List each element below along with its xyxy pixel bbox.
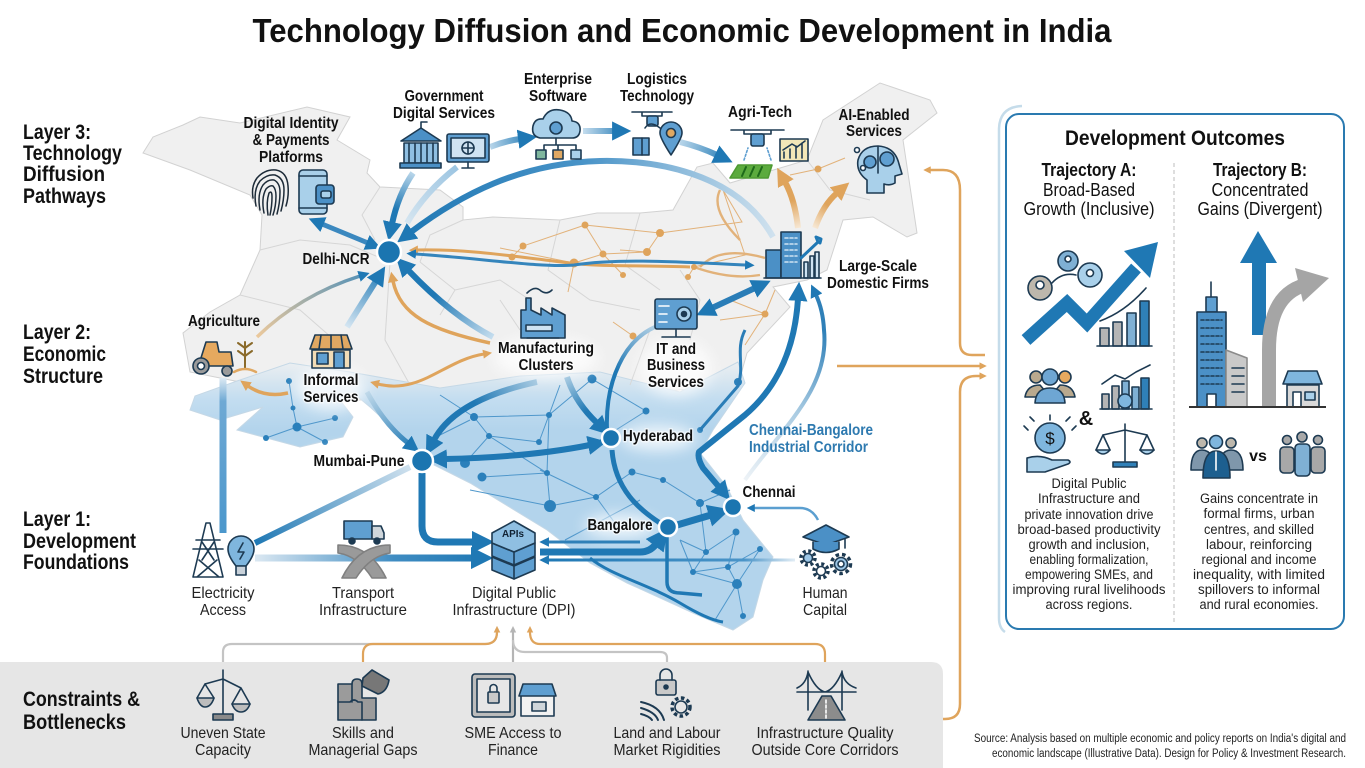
arrow: IT services and firms [712, 288, 755, 308]
label: IT and business services: Business [647, 357, 705, 374]
connector: skills gaps [363, 632, 497, 662]
label: IT and business services: IT and [656, 341, 696, 358]
icon: IT server monitor [655, 299, 697, 337]
arrow: manufacturing and informal services [378, 354, 484, 386]
label: human capital: Human [802, 585, 848, 602]
icon: truck on road [338, 521, 390, 578]
arrow: DPI upper return [548, 540, 640, 544]
icon: monitor with globe [447, 134, 489, 168]
arrow: government to Delhi [392, 173, 413, 224]
arrow: manufacturing to Mumbai [434, 382, 537, 440]
divider [1173, 163, 1175, 625]
node: Chennai [724, 498, 742, 516]
trajectory A description: Infrastructure and [1038, 491, 1140, 506]
arrow: industrial corridor [698, 299, 798, 487]
outer accent arc [999, 106, 1022, 632]
trajectory B heading: Gains (Divergent) [1198, 199, 1322, 219]
title: Technology Diffusion and Economic Development in India [252, 12, 1112, 49]
flow arrows [223, 131, 985, 719]
layer 3 label: Technology [23, 142, 122, 165]
arrow: outer corridor arc [745, 295, 824, 480]
heading: constraints and bottlenecks: Constraints & [23, 688, 140, 711]
arrow: electricity to Mumbai [255, 467, 410, 543]
label: SME access to finance: SME Access to [464, 725, 562, 742]
icon: large firms [764, 232, 821, 278]
arrow: economic structure to outcomes [837, 365, 980, 367]
arrow: coastal line [700, 330, 745, 430]
connector: state capacity [223, 632, 497, 662]
node: Hyderabad [602, 429, 620, 447]
arrow: digital services to Delhi [407, 167, 457, 223]
trajectory B description: Gains concentrate in [1200, 491, 1318, 506]
label: AI-enabled services: Services [846, 123, 902, 140]
icon: government building [400, 122, 441, 168]
icon: business professionals [1191, 436, 1243, 478]
trajectory A description: growth and inclusion, [1028, 537, 1150, 552]
arrow: constraints to outcomes [928, 376, 980, 719]
label: government digital services: Digital Services [393, 105, 495, 122]
arrow: human capital to Chennai [754, 508, 818, 520]
arrow: electricity to DPI [255, 554, 473, 562]
arrow: firms to agri-tech [785, 182, 798, 228]
icon: corporate tower [1197, 282, 1247, 407]
technology pathway labels [188, 71, 929, 619]
trajectory B description: labour, reinforcing [1206, 537, 1312, 552]
versus label: vs [1249, 448, 1267, 465]
label: digital public infrastructure: Digital Public [472, 585, 556, 602]
icon: small shop [519, 684, 556, 716]
trajectory A description: Digital Public [1052, 476, 1127, 491]
layer 2 label: Economic [23, 343, 106, 366]
label: infrastructure quality: Outside Core Corridors [752, 742, 898, 759]
label: manufacturing clusters: Manufacturing [498, 340, 594, 357]
label: electricity access: Access [200, 602, 246, 619]
trajectory B description: regional and income [1202, 552, 1316, 567]
layer 3 label: Pathways [23, 185, 106, 208]
arrow: firms to Delhi orange [417, 250, 690, 267]
arrow: informal services to Mumbai [367, 392, 408, 443]
label: logistics technology: Logistics [627, 71, 687, 88]
label: land and labour: Market Rigidities [614, 742, 720, 759]
arrow: Bangalore south [667, 537, 702, 595]
icon: balance scales [1096, 424, 1154, 467]
arrow: IT services to Hyderabad [607, 327, 655, 430]
label: transport infrastructure: Infrastructure [319, 602, 407, 619]
label: Mumbai-Pune: Mumbai-Pune [314, 453, 405, 470]
label: manufacturing clusters: Clusters [518, 357, 574, 374]
trajectory B description: and rural economies. [1200, 597, 1318, 612]
label: large-scale domestic firms: Large-Scale [839, 258, 917, 275]
icon: small storefront [1283, 371, 1322, 407]
icon: DPI server stack: APIs [502, 529, 524, 540]
arrow: outcomes feedback to AI [930, 170, 985, 355]
icon: growth zigzag arrow [1026, 242, 1158, 340]
label: infrastructure quality: Infrastructure Quality [756, 725, 894, 742]
map: soft label haze [297, 338, 712, 538]
label: uneven state capacity: Uneven State [180, 725, 266, 742]
label: Hyderabad: Hyderabad [623, 428, 693, 445]
label: digital identity: Platforms [259, 149, 323, 166]
arrow: logistics to agri-tech [680, 142, 717, 155]
label: digital identity: Digital Identity [244, 115, 339, 132]
layer 1 label: Foundations [23, 551, 129, 574]
trajectory B description: inequality, with limited [1193, 567, 1325, 582]
trajectory A description: empowering SMEs, and [1025, 567, 1153, 582]
layer 2 label: Layer 2: [23, 321, 91, 344]
layer 1 label: Layer 1: [23, 508, 91, 531]
icon: puzzle [338, 670, 389, 720]
label: electricity access: Electricity [192, 585, 254, 602]
icon: logistics drone and pin [632, 112, 682, 155]
icon: phone wallet [299, 170, 334, 214]
layer 2 label: Structure [23, 365, 103, 388]
trajectory B description: spillovers to informal [1198, 582, 1320, 597]
trajectory A description: broad-based productivity [1018, 522, 1161, 537]
icon: fingerprint [252, 170, 288, 215]
trajectory B heading: Trajectory B: [1213, 160, 1307, 180]
icon: scales [197, 670, 250, 720]
map: orange network [500, 158, 845, 345]
label: agri-tech: Agri-Tech [728, 104, 792, 121]
node: Bangalore [659, 518, 677, 536]
trajectory B description: centres, and skilled [1204, 522, 1314, 537]
trajectory B heading: Concentrated [1212, 180, 1308, 200]
layer 1 label: Development [23, 530, 136, 553]
label: digital public infrastructure: Infrastructure (DPI) [452, 602, 576, 619]
icon: connected people [1028, 251, 1102, 300]
label: IT and business services: Services [648, 374, 704, 391]
connector: SME finance [512, 632, 514, 662]
label: skills and managerial gaps: Managerial Gaps [308, 742, 418, 759]
icon: hand with coin: $ [1045, 429, 1055, 448]
India map [143, 83, 937, 630]
label: transport infrastructure: Transport [332, 585, 395, 602]
arrow: Mumbai and Hyderabad [445, 445, 590, 459]
label: large-scale domestic firms: Domestic Firms [827, 275, 929, 292]
constraint connectors [223, 632, 825, 662]
label: informal services: Services [304, 389, 359, 406]
arrow: government services to enterprise software [490, 139, 520, 147]
label: Delhi-NCR: Delhi-NCR [302, 251, 370, 268]
icon: DPI server stack [492, 521, 535, 579]
trajectory B description: formal firms, urban [1204, 506, 1314, 521]
panel heading: Development Outcomes [1065, 127, 1285, 150]
arrow: DPI lower to human capital [548, 558, 795, 562]
label: government digital services: Government [404, 88, 484, 105]
heading: constraints and bottlenecks: Bottlenecks [23, 711, 126, 734]
icon: safe and shop [472, 674, 556, 717]
icon: electricity pylon and bulb [193, 523, 254, 577]
icon: factory [521, 288, 565, 338]
arrow: southern coastal route [590, 558, 723, 622]
icon: community group [1025, 369, 1075, 403]
arrow: enterprise to logistics [583, 128, 614, 134]
connector: land and labour [513, 640, 667, 662]
label: land and labour: Land and Labour [614, 725, 721, 742]
arrow: firms and Delhi double [415, 254, 746, 266]
icon: hand with coin [1024, 415, 1076, 472]
icon: informal shop [310, 335, 352, 368]
constraints labels [23, 688, 898, 759]
hub nodes [377, 240, 742, 536]
map: blue network [263, 374, 763, 620]
map: northern region [143, 83, 937, 400]
node: Mumbai-Pune [411, 450, 433, 472]
icon: investment chart [1100, 365, 1152, 409]
label: Chennai: Chennai [742, 484, 796, 501]
trajectory A heading: Trajectory A: [1042, 160, 1136, 180]
panel frame [1006, 114, 1344, 629]
label: Bangalore: Bangalore [588, 517, 653, 534]
icon: bridge and road [797, 671, 856, 720]
arrow: informal services to agriculture [248, 386, 288, 394]
arrow: Mumbai to DPI [422, 473, 474, 542]
icon: diverging grey arrow [1269, 268, 1329, 407]
icon: lock and gear [641, 669, 690, 720]
icon: human capital cap and gears [801, 525, 850, 578]
arrow: DPI to Bangalore [540, 544, 656, 552]
connector: infrastructure quality [530, 632, 825, 662]
label: digital identity: & Payments [252, 132, 330, 149]
trajectory A heading: Growth (Inclusive) [1024, 199, 1154, 219]
icon: cloud software [533, 110, 581, 159]
icon: agri-tech drone [730, 130, 808, 178]
arrow: firms to AI services [815, 193, 837, 228]
icon: workers group [1280, 432, 1325, 476]
trajectory A description: improving rural livelihoods [1012, 582, 1166, 597]
label: skills and managerial gaps: Skills and [332, 725, 394, 742]
arrow: manufacturing to Delhi blue [408, 270, 493, 337]
map: state borders [240, 160, 870, 385]
label: SME access to finance: Finance [488, 742, 538, 759]
trajectory A description: private innovation drive [1024, 507, 1154, 522]
label: human capital: Capital [803, 602, 847, 619]
arrow: manufacturing to Delhi orange [393, 281, 490, 343]
map: southern region [190, 362, 773, 630]
label: uneven state capacity: Capacity [195, 742, 251, 759]
arrow: manufacturing to Hyderabad [567, 377, 597, 423]
layer 3 label: Layer 3: [23, 121, 91, 144]
arrow: digital identity to Delhi [322, 224, 368, 243]
label: logistics technology: Technology [620, 88, 694, 105]
node: Delhi-NCR [377, 240, 401, 264]
trajectory A description: enabling formalization, [1030, 552, 1148, 567]
outcomes panel [999, 106, 1344, 632]
icon: AI head [854, 146, 902, 193]
constraints band [0, 662, 943, 768]
arrow: Hyderabad to Bangalore [612, 450, 660, 523]
icon: safe [472, 674, 515, 717]
label: AI-enabled services: AI-Enabled [838, 107, 910, 124]
label: Chennai-Bangalore Industrial Corridor: Industrial Corridor [749, 439, 868, 456]
layer labels [23, 121, 136, 574]
icon: tractor and wheat [193, 342, 256, 376]
ampersand: & [1079, 408, 1093, 430]
ground line [1189, 406, 1326, 408]
icon: concentrated up arrow [1240, 231, 1277, 335]
icon: rising bars [1097, 288, 1152, 346]
label: enterprise software: Enterprise [524, 71, 592, 88]
arrow: Bangalore to Chennai [677, 515, 711, 525]
arrow: agriculture to Delhi [257, 276, 360, 337]
layer 3 label: Diffusion [23, 163, 105, 186]
arrow: electricity to agriculture [220, 378, 226, 533]
label: informal services: Informal [304, 372, 358, 389]
label: enterprise software: Software [529, 88, 587, 105]
arrow: informal services to Delhi [347, 281, 376, 327]
label: Chennai-Bangalore Industrial Corridor: Chennai-Bangalore [749, 422, 873, 439]
label: agriculture: Agriculture [188, 313, 260, 330]
trajectory A description: across regions. [1046, 597, 1132, 612]
trajectory A heading: Broad-Based [1043, 180, 1135, 200]
arrow: wide arc to Delhi [411, 161, 773, 237]
